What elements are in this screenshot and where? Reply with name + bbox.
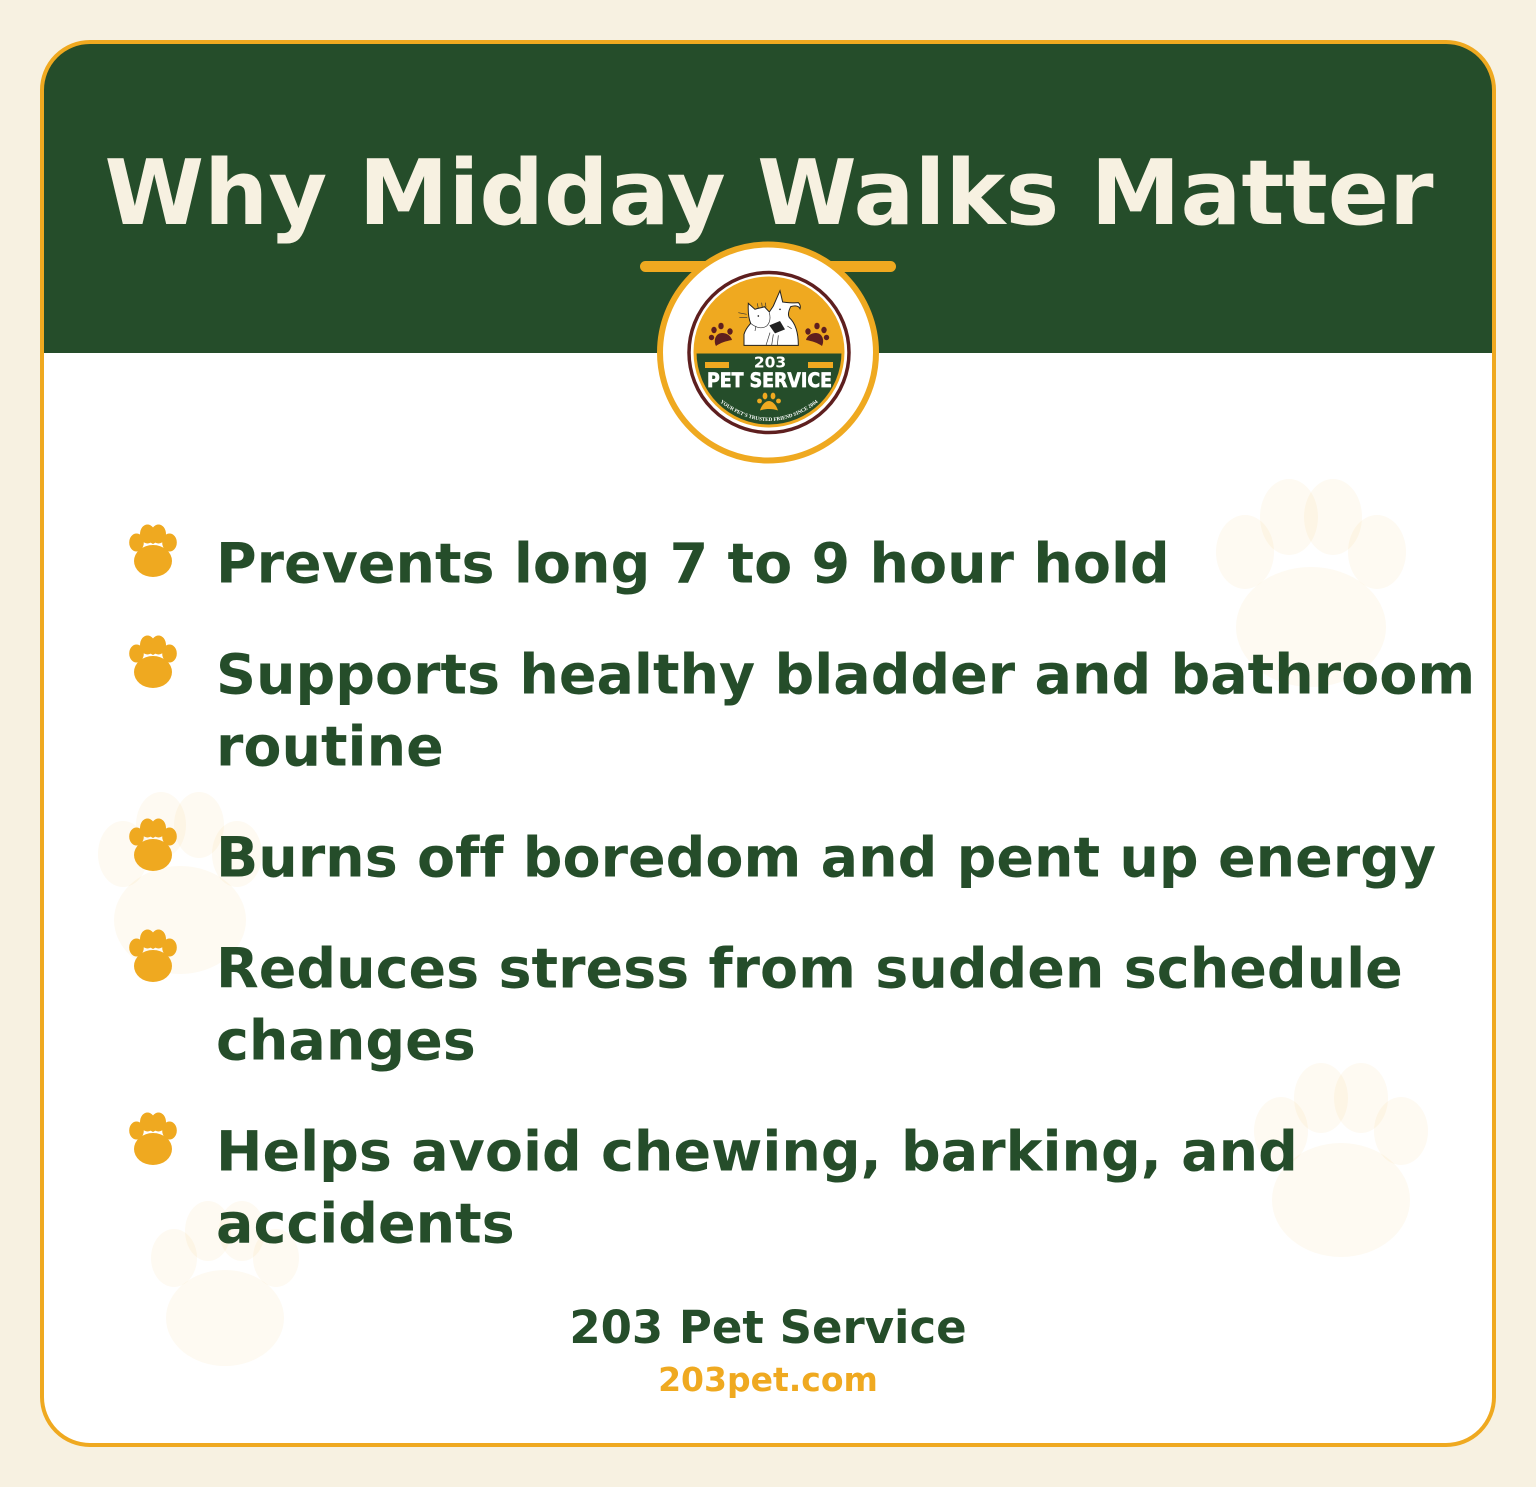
bullet 2: routine	[216, 714, 444, 780]
logo paw right	[805, 323, 829, 346]
bullet 3: Burns off boredom and pent up energy	[216, 826, 1436, 890]
watermark paw: bottom left	[151, 1201, 299, 1366]
title: Why Midday Walks Matter	[104, 141, 1434, 246]
bullet 5	[129, 1112, 1298, 1256]
logo small paw	[757, 393, 781, 410]
logo green band	[696, 354, 842, 424]
logo badge	[657, 242, 879, 464]
logo tagline	[708, 392, 830, 421]
watermark paw: lower right	[1254, 1063, 1428, 1257]
paw icon	[129, 818, 177, 871]
footer brand name: 203 Pet Service	[569, 1301, 967, 1354]
footer website: 203pet.com	[658, 1360, 878, 1399]
bullet 2: Supports healthy bladder and bathroom	[216, 642, 1475, 708]
watermark paw: middle left	[98, 792, 262, 974]
paw icon	[129, 1112, 177, 1165]
logo paw left	[709, 323, 733, 346]
bullet 4: changes	[216, 1008, 476, 1074]
title underline	[640, 261, 896, 272]
bullet 1: Prevents long 7 to 9 hour hold	[216, 532, 1170, 596]
logo pets	[738, 291, 800, 345]
logo 203: 203	[754, 354, 786, 372]
bullet 2	[129, 636, 1475, 780]
logo bars	[705, 362, 729, 368]
bullet 4: Reduces stress from sudden schedule	[216, 936, 1403, 1002]
logo badge: YOUR PET'S TRUSTED FRIEND SINCE 2004	[720, 400, 818, 421]
logo ring	[689, 272, 849, 432]
bullet 4	[129, 930, 1403, 1074]
header band	[42, 42, 1494, 353]
paw icon	[129, 636, 177, 688]
logo name: PET SERVICE	[707, 369, 832, 392]
watermark paw: top right	[1216, 479, 1406, 687]
paw icon	[129, 930, 177, 982]
bullet 5: Helps avoid chewing, barking, and	[216, 1120, 1298, 1184]
paw icon	[129, 524, 177, 577]
bullet 5: accidents	[216, 1192, 515, 1256]
